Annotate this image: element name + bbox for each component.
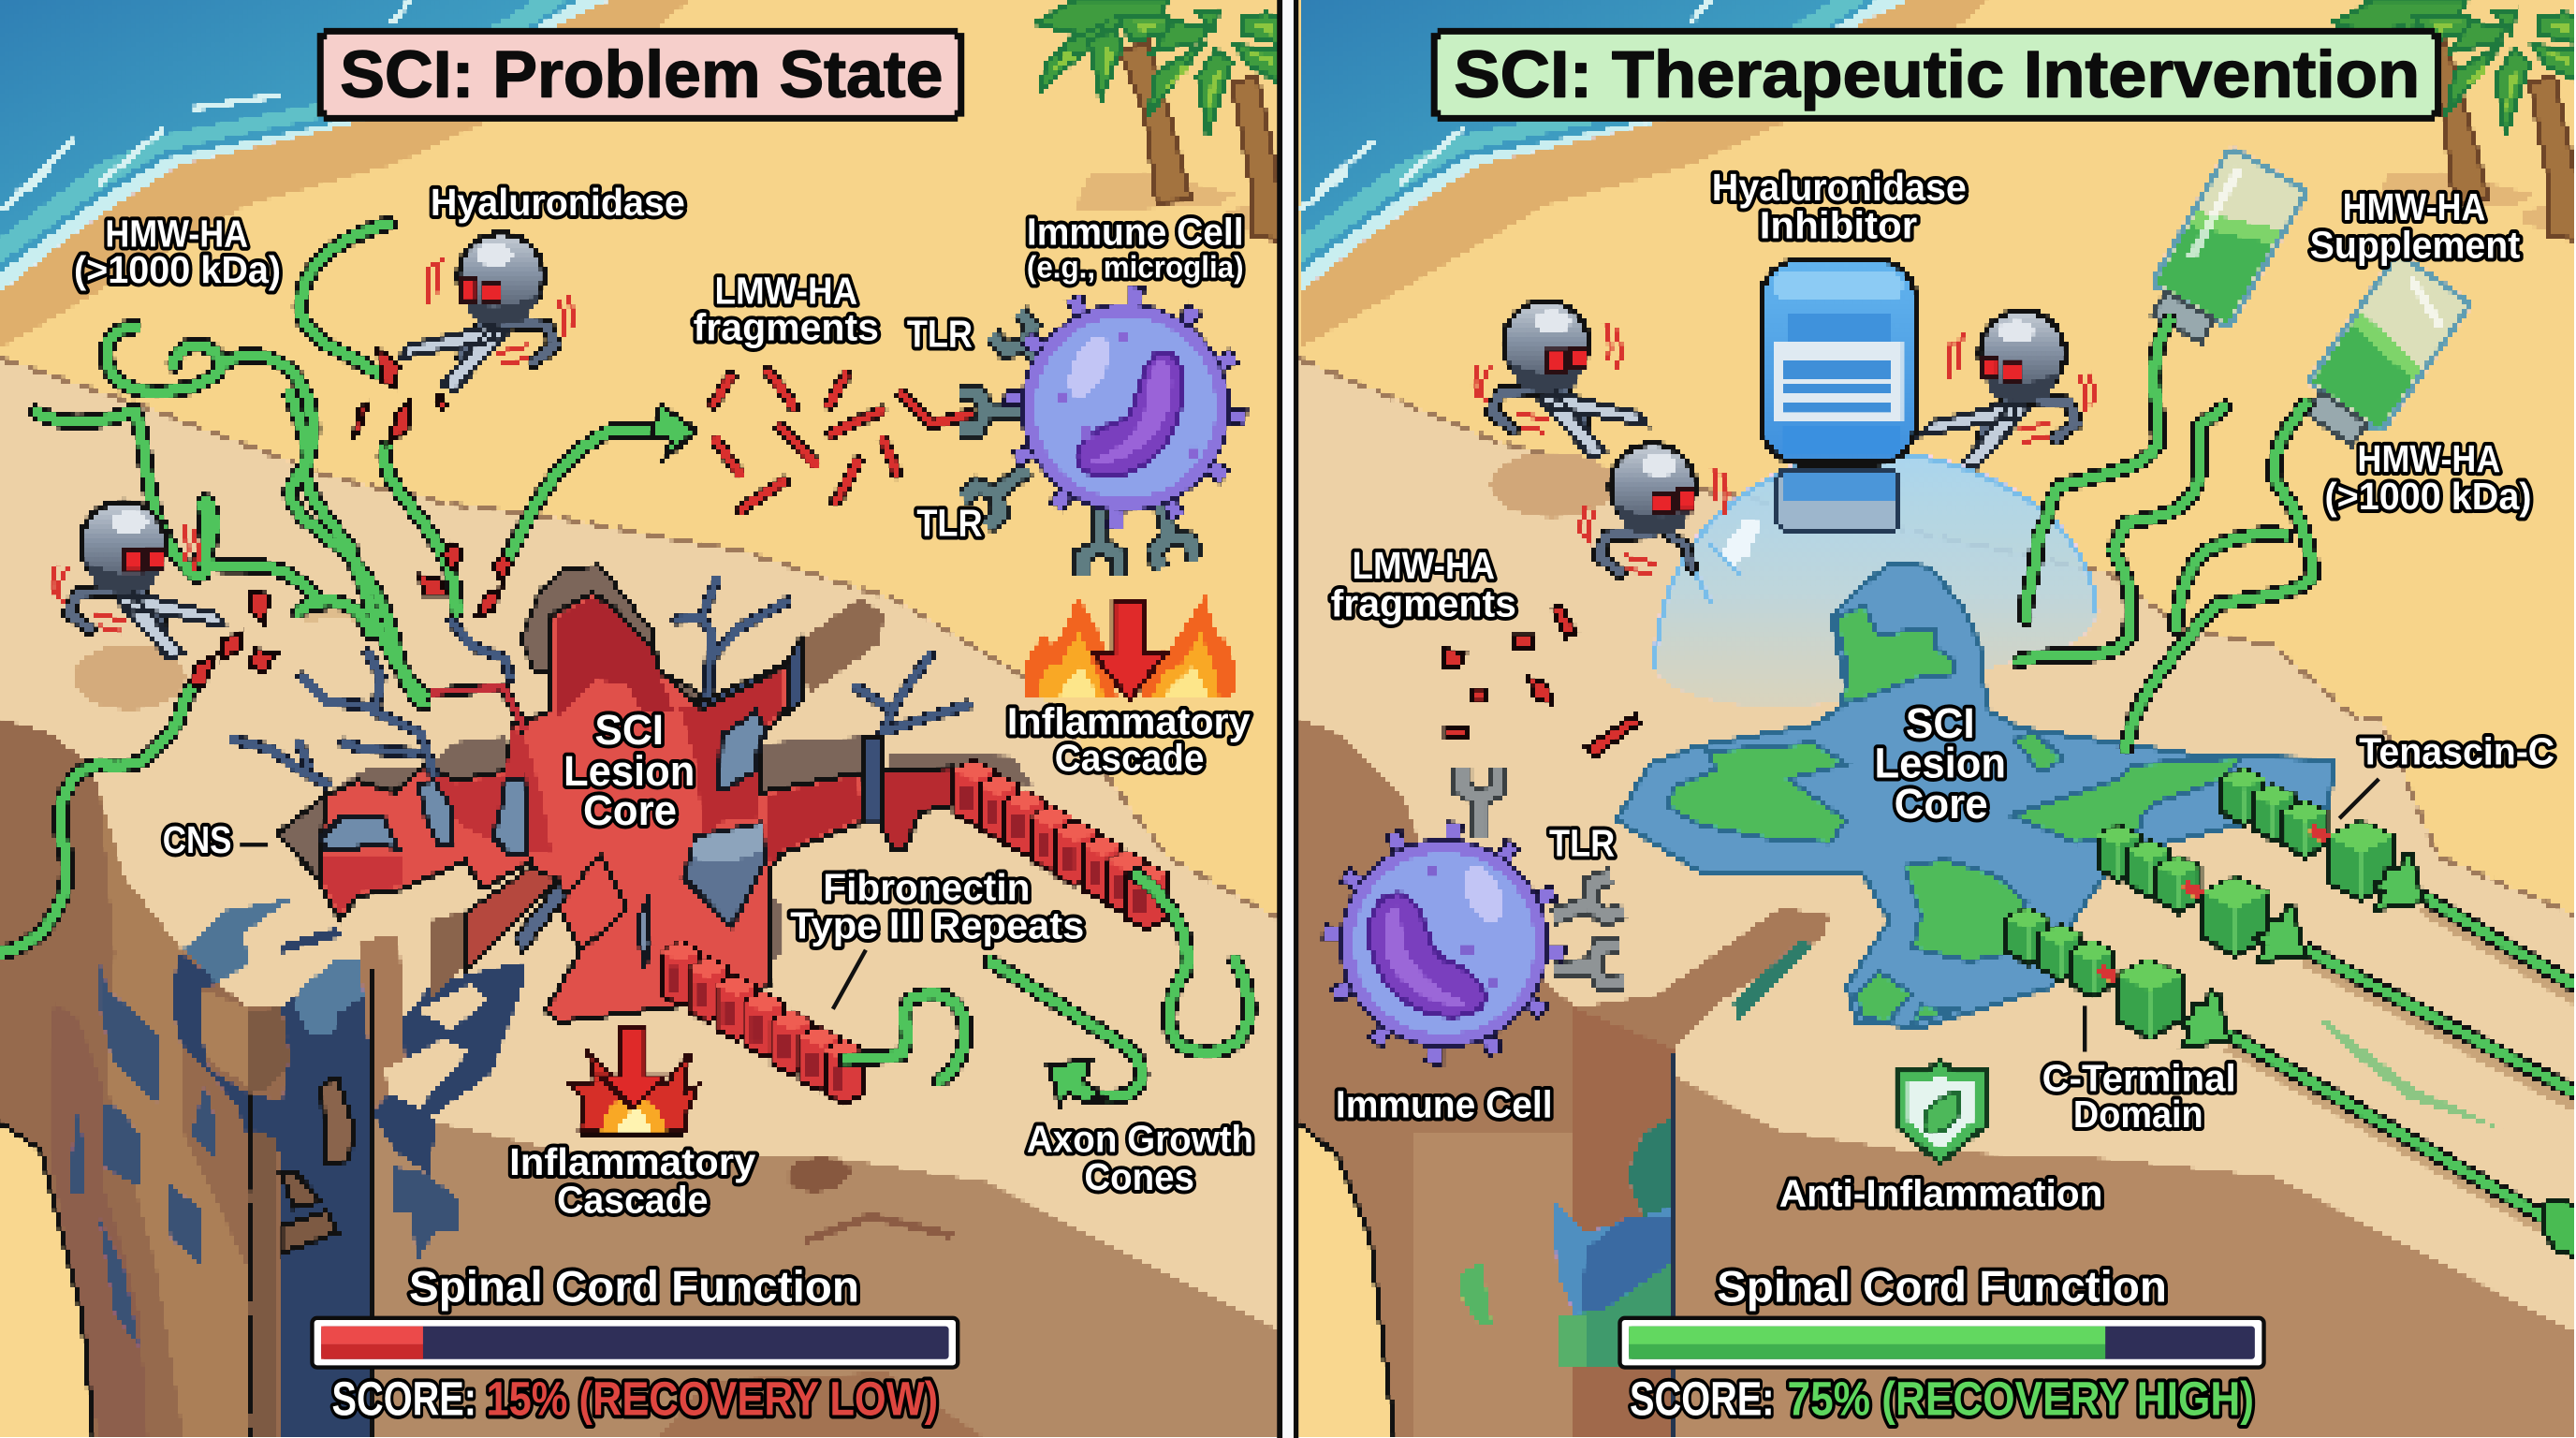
LMW-HA fragments bbox=[713, 372, 970, 509]
label: C-terminal domain: C-Terminal bbox=[2042, 1057, 2236, 1100]
label: fibronectin: Fibronectin bbox=[823, 866, 1030, 909]
progress bar: 15% bbox=[312, 1318, 958, 1368]
spinal cord surface bbox=[0, 356, 1277, 1329]
label: HMW-HA right: HMW-HA bbox=[2358, 437, 2500, 480]
immune cell and TLR bbox=[1334, 770, 1623, 1053]
label: immune cell: Immune Cell bbox=[1027, 211, 1244, 254]
tenascin shaft C bbox=[2178, 991, 2576, 1255]
label: LMW-HA left bbox=[694, 270, 879, 348]
label: HMW-HA right bbox=[2324, 437, 2532, 518]
label: immune cell right: Immune Cell bbox=[1336, 1083, 1553, 1126]
vial: HMW-HA >1000 kDa bbox=[2292, 253, 2471, 455]
label: TLR: TLR bbox=[907, 312, 973, 355]
label: HMW-HA left: HMW-HA bbox=[105, 212, 248, 255]
score: 75% bbox=[1630, 1372, 2254, 1425]
arrow to fragments bbox=[503, 404, 696, 567]
tenascin shaft B bbox=[2254, 906, 2576, 1106]
label: axon growth cones: Cones bbox=[1084, 1155, 1194, 1198]
label: C-terminal domain: Domain bbox=[2073, 1093, 2203, 1136]
label: anti-inflammation: Anti-Inflammation bbox=[1779, 1171, 2103, 1214]
tenascin-C chain C bbox=[2007, 909, 2182, 1038]
label: tenascin-C: Tenascin-C bbox=[2359, 729, 2554, 772]
label: inflammatory cascade lower: Inflammatory bbox=[509, 1140, 756, 1183]
label: LMW-HA left: LMW-HA bbox=[714, 270, 857, 313]
label: spinal cord function right: Spinal Cord Function bbox=[1717, 1262, 2167, 1312]
fibronectin chain lower bbox=[661, 942, 864, 1105]
damaged cord cross-section bbox=[172, 897, 526, 1438]
supplement HMW-HA strands bbox=[2019, 320, 2313, 748]
label: LMW-HA right: fragments bbox=[1331, 581, 1516, 624]
label: axon growth cones bbox=[1027, 1118, 1253, 1198]
cliff and lower earth bbox=[0, 718, 1283, 1438]
label: TLR right: TLR bbox=[1549, 822, 1615, 865]
healing cord cross-section bbox=[1459, 1118, 1673, 1368]
label: SCI lesion core bbox=[564, 706, 695, 834]
score: 15% bbox=[332, 1372, 938, 1425]
tenascin shaft A bbox=[2372, 854, 2576, 999]
icon: anti-inflammation shield bbox=[1895, 1060, 1986, 1164]
title: therapeutic intervention: SCI: Therapeutic Intervention bbox=[1454, 37, 2420, 111]
label: HMW-HA supplement bbox=[2310, 185, 2520, 267]
label: inflammatory cascade right: Cascade bbox=[1055, 736, 1204, 779]
label: fibronectin bbox=[790, 866, 1084, 946]
TLR receptors left bbox=[958, 312, 1195, 575]
beach background bbox=[0, 0, 1277, 913]
spinal cord surface bbox=[1298, 359, 2576, 1438]
robot: upper left bbox=[1474, 301, 1647, 459]
label: HMW-HA left bbox=[74, 212, 281, 291]
protective dome bbox=[1654, 453, 2097, 709]
lesion cracks bbox=[233, 580, 968, 823]
label: immune cell bbox=[1027, 211, 1244, 286]
tenascin-C chain B bbox=[2098, 826, 2269, 957]
lesion core healing bbox=[1617, 564, 2333, 1027]
label: LMW-HA right bbox=[1331, 544, 1516, 624]
explosion and arrow bbox=[570, 1027, 698, 1137]
title: problem state: SCI: Problem State bbox=[340, 37, 943, 111]
robot: hyaluronidase upper bbox=[399, 233, 573, 391]
label: inflammatory cascade lower: Cascade bbox=[557, 1179, 708, 1222]
green motion smudge bbox=[2315, 1018, 2504, 1131]
label: SCI lesion core right: Core bbox=[1895, 780, 1988, 828]
HMW-HA strands bbox=[0, 224, 457, 953]
label: fibronectin: Type III Repeats bbox=[790, 903, 1084, 946]
label: LMW-HA left: fragments bbox=[694, 305, 879, 348]
robot: lower left bbox=[1581, 444, 1727, 575]
immune cell bbox=[1016, 298, 1236, 518]
beach background bbox=[1298, 0, 2576, 1438]
label: SCI lesion core: Core bbox=[583, 786, 677, 834]
progress bar: 75% bbox=[1620, 1318, 2264, 1368]
label: spinal cord function left: Spinal Cord Function bbox=[409, 1262, 859, 1312]
upper earth bank bbox=[801, 596, 884, 696]
label: HMW-HA supplement: HMW-HA bbox=[2343, 185, 2485, 228]
fibronectin chain upper bbox=[955, 761, 1166, 929]
cliff and lower earth bbox=[1298, 718, 2576, 1438]
lesion core bbox=[318, 594, 951, 1022]
robot: right of canister bbox=[1921, 311, 2094, 468]
score: 15%: SCORE: bbox=[332, 1372, 476, 1425]
score: 15%: 15% (RECOVERY LOW) bbox=[487, 1372, 938, 1425]
lesion rim bbox=[278, 565, 1033, 961]
label: axon growth cones: Axon Growth bbox=[1027, 1118, 1253, 1161]
label: SCI lesion core: SCI bbox=[594, 706, 664, 754]
label: inflammatory cascade lower bbox=[509, 1140, 756, 1222]
score: 75%: SCORE: bbox=[1630, 1372, 1775, 1425]
label: inflammatory cascade right bbox=[1007, 700, 1251, 779]
divider bbox=[1277, 0, 1298, 1438]
cleaved red HA fragments bbox=[191, 348, 513, 687]
label: SCI lesion core right: SCI bbox=[1906, 699, 1975, 747]
leader lines bbox=[240, 779, 2378, 1051]
panel: problem state bbox=[0, 0, 1283, 1438]
vial: HMW-HA supplement bbox=[2138, 147, 2307, 351]
label: TLR lower: TLR bbox=[916, 501, 983, 544]
label: hyaluronidase inhibitor: Inhibitor bbox=[1760, 204, 1917, 247]
tenascin-C chain A bbox=[2221, 770, 2393, 901]
label: hyaluronidase: Hyaluronidase bbox=[431, 181, 685, 224]
label: hyaluronidase inhibitor: Hyaluronidase bbox=[1712, 166, 1967, 209]
LMW-HA fragments scattered bbox=[1442, 605, 1640, 757]
label: SCI lesion core: Lesion bbox=[564, 747, 695, 795]
label: C-terminal domain bbox=[2042, 1057, 2236, 1136]
lesion rock shards bbox=[322, 712, 768, 970]
label: immune cell: (e.g., microglia) bbox=[1027, 251, 1244, 286]
label: LMW-HA right: LMW-HA bbox=[1352, 544, 1495, 587]
label: inflammatory cascade right: Inflammatory bbox=[1007, 700, 1251, 743]
inflammation flames and arrow bbox=[1024, 592, 1236, 700]
label: hyaluronidase inhibitor bbox=[1712, 166, 1967, 247]
robot: hyaluronidase left bbox=[51, 501, 225, 659]
hyaluronidase inhibitor canister bbox=[1761, 259, 1915, 531]
score: 75%: 75% (RECOVERY HIGH) bbox=[1788, 1372, 2254, 1425]
axon growth cones bbox=[846, 874, 1249, 1105]
label: HMW-HA right: (>1000 kDa) bbox=[2324, 475, 2532, 518]
label: CNS: CNS bbox=[163, 818, 231, 861]
label: SCI lesion core right bbox=[1875, 699, 2006, 828]
label: SCI lesion core right: Lesion bbox=[1875, 739, 2006, 786]
label: HMW-HA supplement: Supplement bbox=[2310, 224, 2520, 267]
label: HMW-HA left: (>1000 kDa) bbox=[74, 248, 281, 291]
panel: therapeutic intervention bbox=[1298, 0, 2576, 1438]
